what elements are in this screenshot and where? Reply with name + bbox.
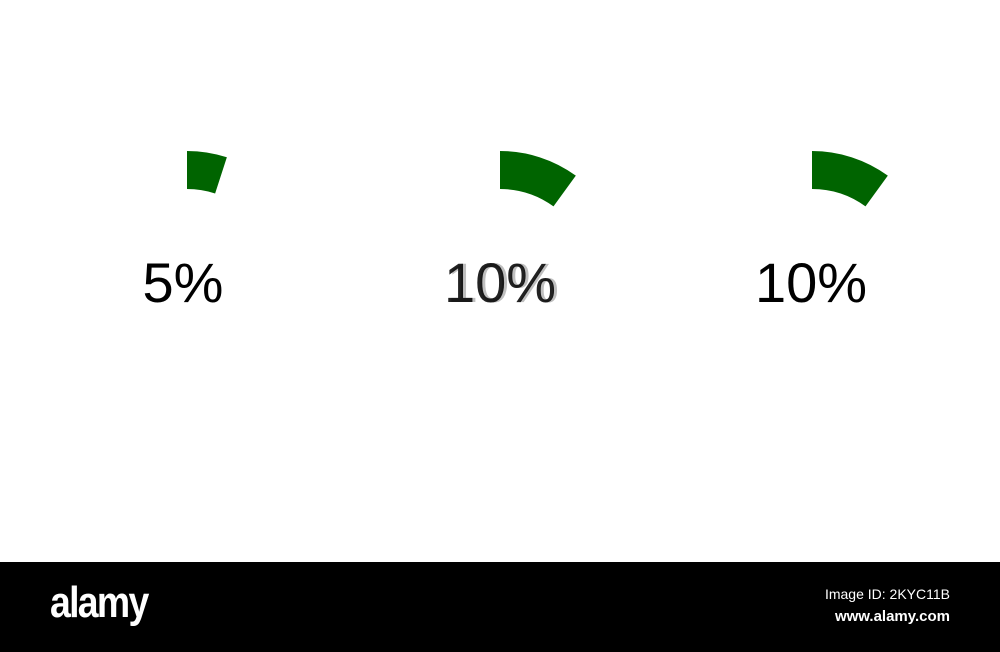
label: 5%: 5% <box>143 251 223 314</box>
gauge arc 2: 10% <box>500 151 576 206</box>
label: 10% middle: 10% <box>447 251 559 314</box>
gauge arc 3: 10% <box>812 151 888 206</box>
label: 10% right: 10% <box>755 251 867 314</box>
logo: alamy: alamy <box>50 578 148 627</box>
footer bar <box>0 562 1000 652</box>
label: 10% middle: 10% <box>444 251 556 314</box>
website text: www.alamy.com <box>835 608 950 625</box>
image id text: Image ID: 2KYC11B <box>825 586 950 602</box>
gauge arc 1: 5% <box>187 151 227 193</box>
